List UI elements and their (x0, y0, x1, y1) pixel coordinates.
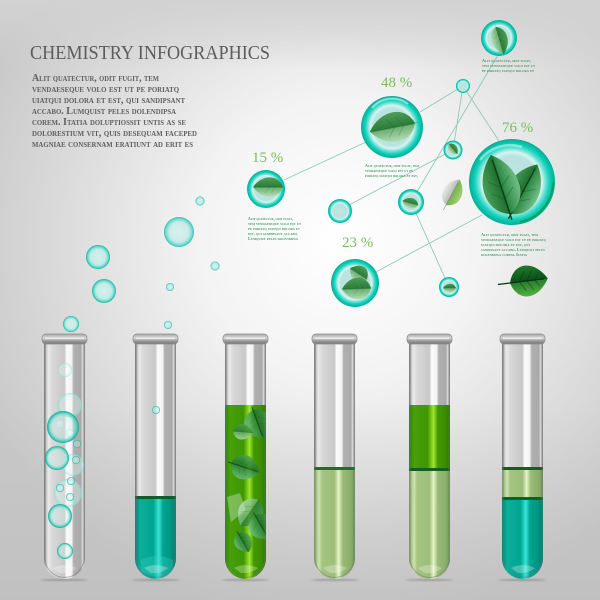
test tube 6: three layers (500, 334, 545, 588)
bubble: top (481, 20, 517, 56)
small caption: top: pe poriatq uiatqui dolora et (482, 68, 534, 73)
intro text block: magniae consernam eratiunt ad erit es (32, 139, 193, 150)
bubble: 76 percent (469, 139, 555, 227)
small caption: 15 percent: tem vendaeseque volo est ut (248, 221, 301, 226)
small caption: 76 percent (481, 232, 547, 257)
bubble: 15 percent (247, 170, 285, 208)
small caption: 48 percent: Alit quatectur, odit fugit, tem (365, 163, 419, 168)
test tube 1: bubbles (42, 334, 87, 579)
intro text block: accabo. Lumquist peles dolendipsa (32, 106, 176, 117)
bubble: small leaf middle (398, 189, 424, 215)
percentage labels (252, 75, 533, 251)
icon: pale leaf (435, 175, 468, 215)
percentage labels: 76 % (502, 120, 533, 136)
title: CHEMISTRY INFOGRAPHICS (30, 42, 270, 64)
percentage labels: 23 % (342, 235, 373, 251)
icon: dark leaf (496, 263, 550, 300)
small caption: top: Alit quatectur, odit fugit, (482, 58, 531, 63)
test tube 2: teal liquid (133, 334, 178, 587)
small caption: 48 percent: vendaeseque volo est ut pe (365, 168, 413, 173)
intro text block: dolorestium vit, quis desequam faceped (32, 128, 197, 139)
small caption: 15 percent: Lumquist peles dolendipsa (248, 236, 299, 241)
small caption: 15 percent (248, 216, 301, 241)
intro text block: uiatqui dolora et est, qui sandipsant (32, 95, 185, 106)
small caption: 76 percent: uiatqui dolora et est, qui (481, 242, 531, 247)
node bubble (456, 79, 470, 93)
bubble: small leaf lower (439, 277, 459, 297)
percentage labels: 48 % (381, 75, 412, 91)
floating bubbles (63, 196, 220, 332)
tube shadows (40, 579, 546, 581)
bubble: small leaf upper (444, 140, 462, 160)
test tube 5: two green layers (407, 334, 452, 589)
intro text block: Alit quatectur, odit fugit, tem (32, 73, 159, 84)
small caption: 15 percent: est, qui sandipsant accabo. (248, 231, 298, 236)
small caption: 15 percent: Alit quatectur, odit fugit, (248, 216, 293, 221)
small caption: 76 percent: Alit quatectur, odit fugit, tem (481, 232, 538, 237)
small caption: 76 percent: vendaeseque volo est ut pe poriatq (481, 237, 547, 242)
intro text block: corem. Itatia doluptiossit untis as se (32, 117, 186, 128)
bubble: plain (328, 199, 352, 223)
small caption: 48 percent: poriatq uiatqui dolora et est, (365, 173, 418, 178)
percentage labels: 15 % (252, 150, 283, 166)
small caption: top (482, 58, 535, 73)
small caption: 48 percent (365, 163, 419, 178)
small caption: 76 percent: sandipsant accabo. Lumquist peles (481, 247, 545, 252)
small caption: 15 percent: pe poriatq uiatqui dolora et (248, 226, 300, 231)
bubble: 48 percent (361, 96, 423, 158)
intro text block: vendaeseque volo est ut pe poriatq (32, 84, 180, 95)
bubble: 23 percent (331, 259, 379, 307)
small caption: top: tem vendaeseque volo est ut (482, 63, 535, 68)
connector lines (284, 55, 499, 287)
test tube 3: green liquid with leaves (222, 334, 268, 579)
small caption: 76 percent: dolendipsa corem. Itatia (481, 252, 528, 257)
intro text block (32, 73, 197, 150)
test tube 4: pale green liquid (312, 334, 357, 588)
